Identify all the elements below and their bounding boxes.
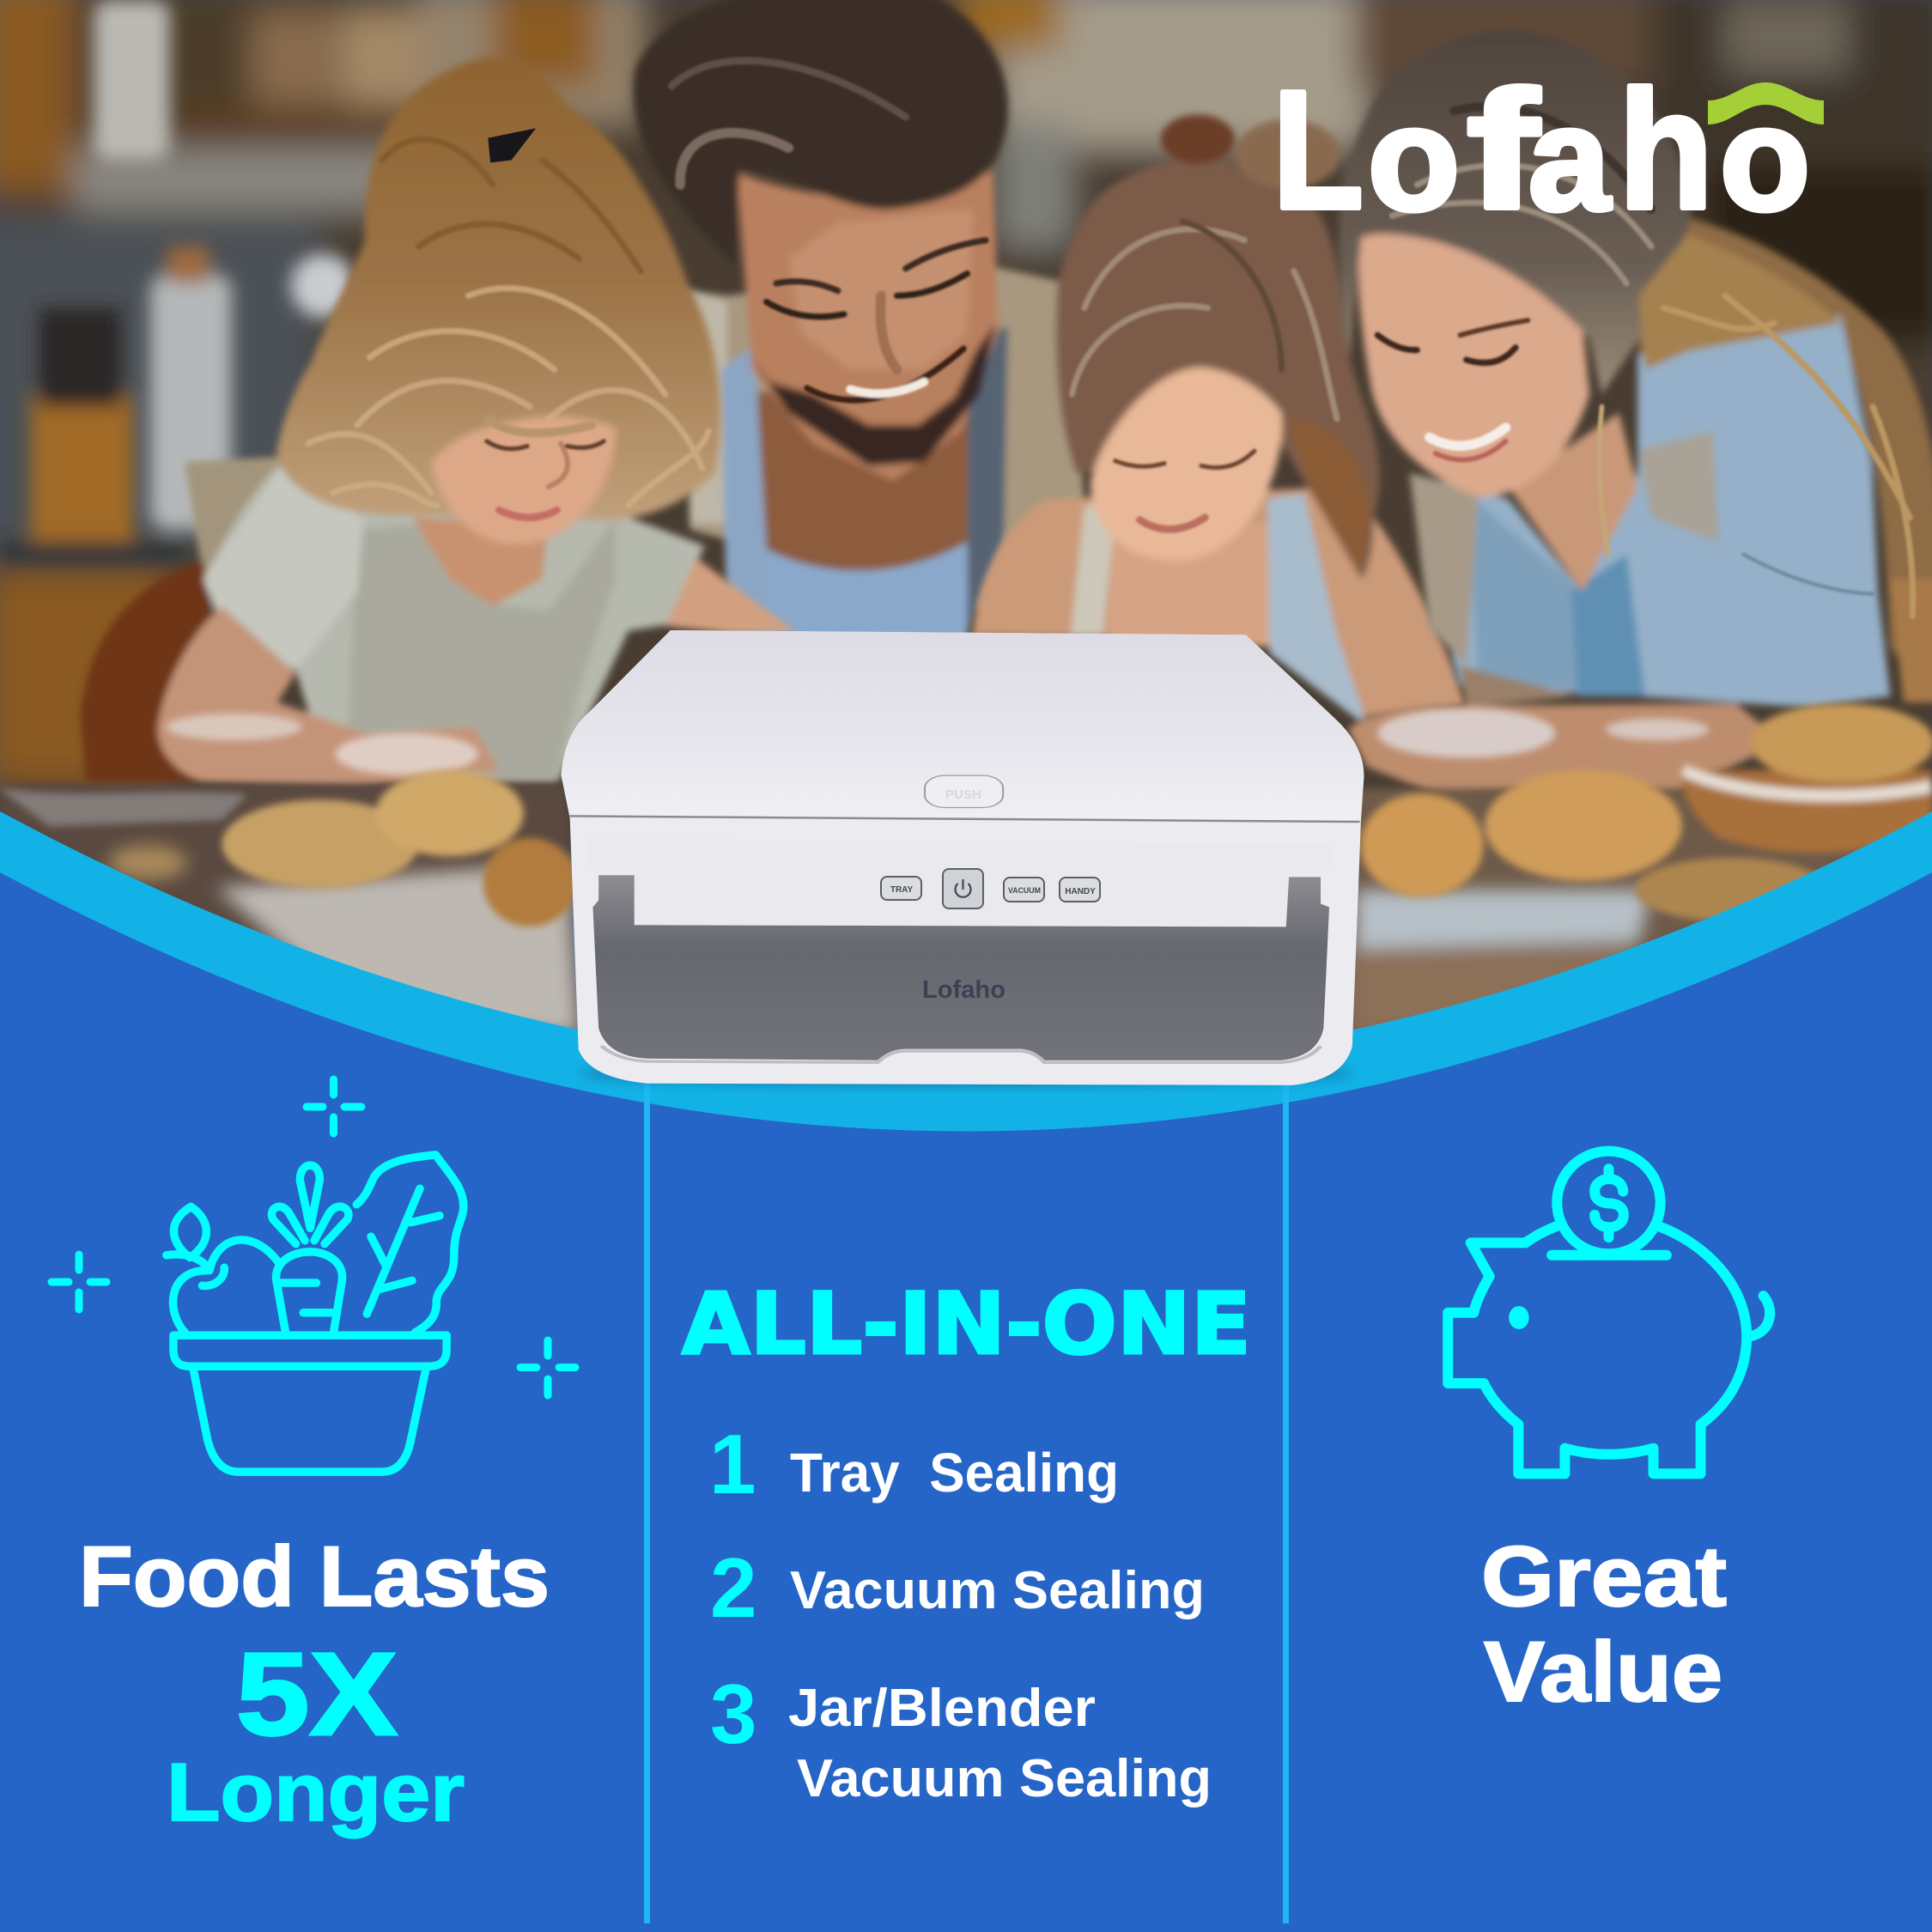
heading: Great: Great [1481,1528,1727,1624]
shirt [680,265,1084,617]
flour on arm [167,714,478,775]
power button [943,869,983,908]
logo wordmark [1273,56,1810,244]
logo wordmark: o [1368,76,1460,241]
icon: vegetable basket [167,1155,464,1472]
kitchen bottles and jars [0,0,355,562]
VACUUM button [1004,878,1044,902]
heading: Value: Value [1484,1624,1722,1719]
item 1: Tray Sealing: 1 [709,1417,756,1511]
logo wordmark: f [1467,56,1540,244]
logo wordmark: L [1273,56,1364,244]
item 1: Tray Sealing [709,1417,1119,1511]
item 3: Jar/Blender Vacuum Sealing: Jar/Blender [788,1679,1096,1738]
light blue curved band [0,811,1932,1932]
logo: Lofaho [1273,56,1824,244]
heading: ALL-IN-ONE: ALL-IN-ONE [682,1275,1251,1374]
heading: Longer: Longer [167,1747,465,1838]
table with flour and pastries [0,703,1932,1035]
item 3: Jar/Blender Vacuum Sealing: Vacuum Sealing [797,1749,1212,1808]
HANDY button: HANDY [1065,887,1096,896]
dark blue lower panel [0,872,1932,1932]
kitchen background [0,0,1932,862]
device brand label: Lofaho [922,976,1005,1004]
heading: Food Lasts: Food Lasts [79,1528,550,1624]
flour on mother's arm [1377,708,1709,758]
item 2: Vacuum Sealing [710,1540,1205,1635]
logo wordmark: o [1720,76,1810,241]
PUSH label: PUSH [945,787,981,802]
TRAY button: TRAY [890,885,913,895]
item 3: Jar/Blender Vacuum Sealing: 3 [710,1667,757,1761]
middle girl [972,114,1465,727]
panel: food lasts longer [52,1079,575,1838]
logo wordmark: h [1619,56,1713,244]
TRAY button [881,877,921,900]
background photo: family baking in kitchen [0,0,1932,1035]
column divider left [644,1078,650,1923]
mother [1339,29,1932,799]
item 3: Jar/Blender Vacuum Sealing [710,1667,1212,1808]
column divider right [1283,1078,1289,1923]
VACUUM button: VACUUM [1008,886,1041,895]
product: Lofaho vacuum sealer [562,630,1364,1085]
panel: great value [1448,1151,1770,1719]
item 2: Vacuum Sealing: 2 [710,1540,757,1635]
logo green accent [1708,82,1824,125]
item 2: Vacuum Sealing: Vacuum Sealing [790,1561,1205,1620]
left girl [80,57,795,788]
device shadow [580,1061,1352,1085]
father [634,0,1084,641]
panel: all-in-one [682,1275,1251,1808]
icon: sparkles [52,1079,575,1395]
device body [562,630,1364,1085]
icon: piggy bank [1448,1151,1770,1473]
HANDY button [1060,878,1100,902]
logo wordmark: a [1528,76,1611,241]
figure: 5X: 5X [236,1629,398,1760]
item 1: Tray Sealing: Tray Sealing [790,1442,1119,1504]
